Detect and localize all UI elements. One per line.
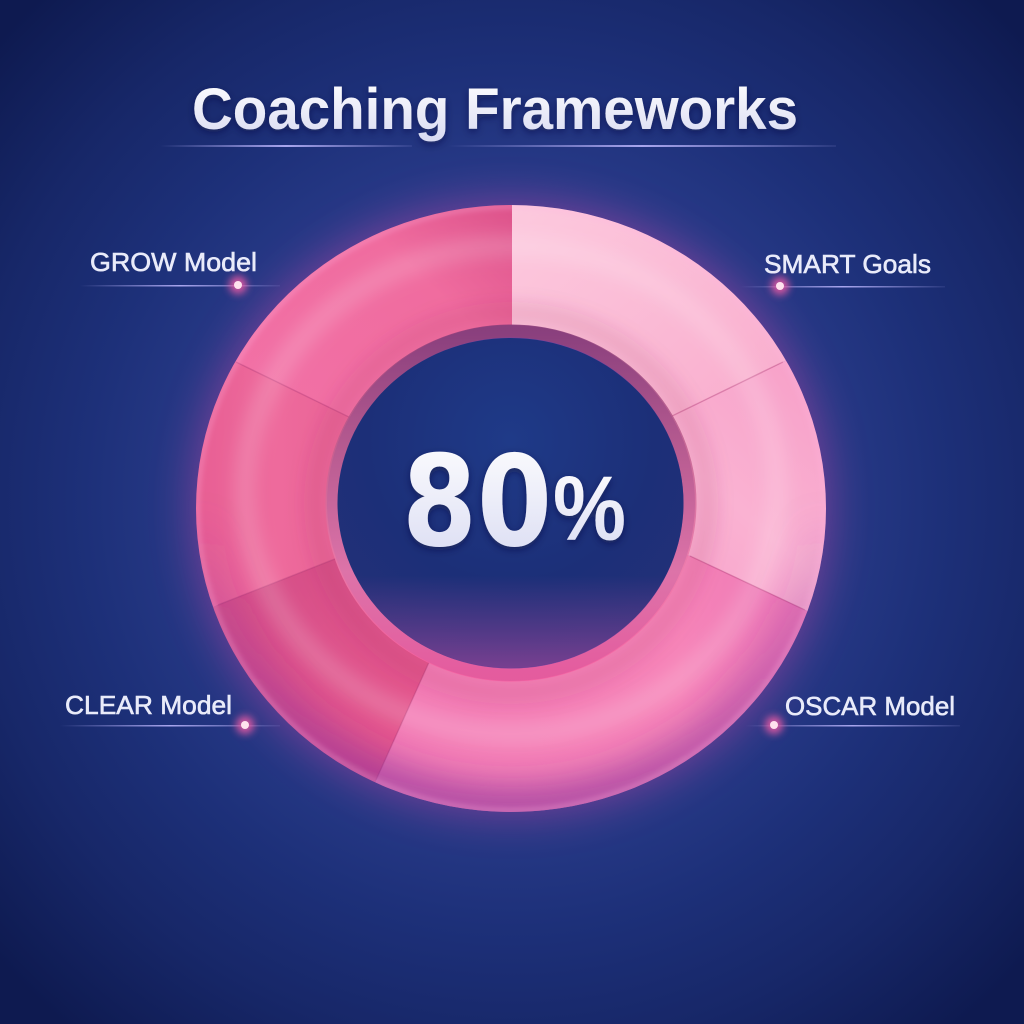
- segment: left: [196, 362, 350, 607]
- label: CLEAR Model: CLEAR Model: [65, 690, 232, 720]
- torus highlight: [245, 246, 777, 734]
- centre value: %: [553, 458, 626, 560]
- centre value: 80: [402, 428, 552, 575]
- label: CLEAR Model: [60, 690, 280, 734]
- torus lower shading: [201, 534, 824, 812]
- segment: CLEAR Model: [213, 559, 428, 782]
- segment: OSCAR Model: [375, 556, 808, 812]
- label: SMART Goals: SMART Goals: [764, 249, 931, 279]
- label: GROW Model: GROW Model: [90, 247, 257, 277]
- title: Coaching Frameworks: [192, 77, 798, 142]
- edge light: [198, 206, 824, 810]
- label: OSCAR Model: OSCAR Model: [785, 691, 955, 721]
- torus inner shading: [315, 313, 707, 693]
- label: SMART Goals: [740, 249, 945, 295]
- label: GROW Model: [80, 247, 280, 294]
- centre hole: [338, 338, 684, 668]
- segment seams: [218, 362, 805, 780]
- inner rim: [332, 331, 690, 675]
- label: OSCAR Model: [745, 691, 960, 734]
- segment: GROW Model: [235, 205, 512, 417]
- segment: right: [672, 360, 826, 611]
- donut ring chart: [168, 176, 854, 840]
- segment: SMART Goals: [512, 205, 786, 416]
